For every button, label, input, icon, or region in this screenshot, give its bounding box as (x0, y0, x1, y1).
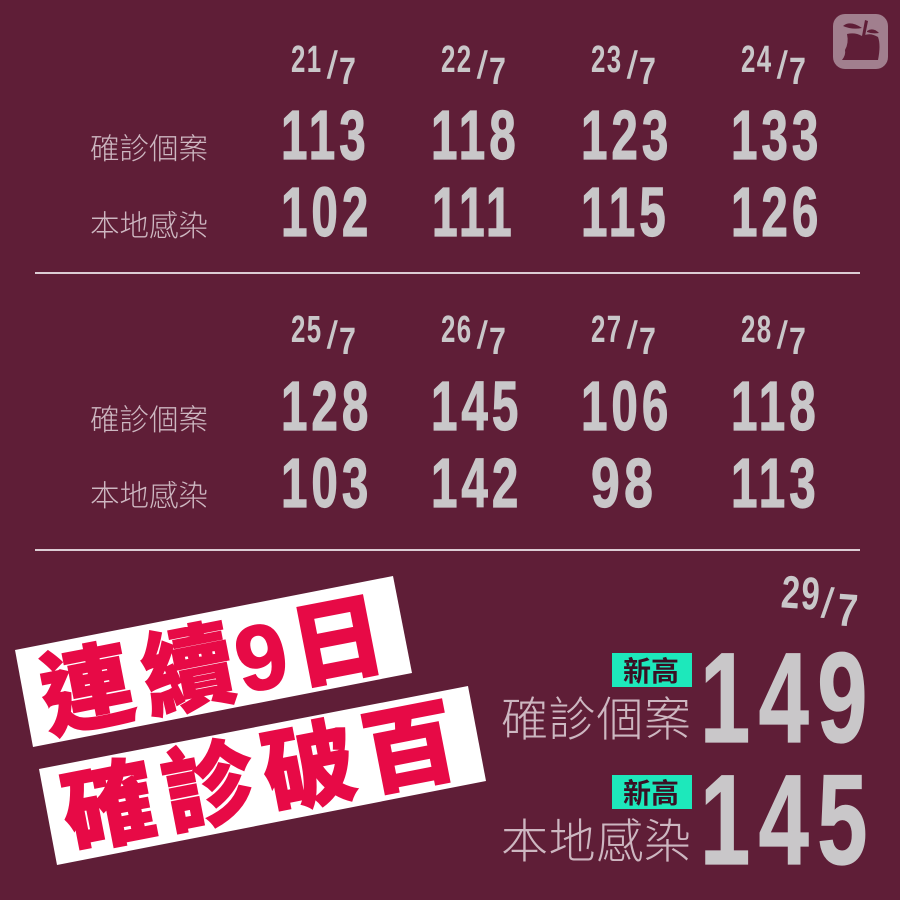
local infection numbers: 111 (432, 172, 515, 251)
confirmed case numbers: 106 (581, 367, 672, 445)
local infection numbers: 115 (581, 173, 670, 251)
banner: confirmed cases over one hundred: 確診破百 (54, 691, 465, 867)
local infection numbers: 98 (591, 444, 657, 523)
badge: new high, confirmed: 新高 (623, 656, 679, 687)
dates row 21-24 July: 22 (441, 38, 472, 80)
confirmed case numbers: 113 (281, 96, 370, 174)
number 145: 145 (700, 750, 876, 892)
dates row 21-24 July: 23 (591, 38, 622, 80)
dates row 21-24 July: 21 (291, 38, 322, 80)
dates row 25-28 July: 7 (639, 321, 658, 363)
confirmed case numbers: 118 (431, 96, 520, 174)
dates row 25-28 July: 7 (789, 321, 808, 363)
label: confirmed cases: 確診個案 (90, 133, 208, 166)
confirmed case numbers: 133 (731, 96, 822, 174)
date 29/7 (779, 567, 862, 637)
dates row 25-28 July: 25 (291, 308, 322, 350)
date 29/7: 29 (780, 567, 823, 620)
dates row 21-24 July: / (327, 45, 338, 87)
confirmed case numbers: 145 (431, 367, 522, 445)
dates row 21-24 July: 7 (789, 51, 808, 93)
label: local infections: 本地感染 (90, 210, 208, 243)
dates row 25-28 July: 7 (489, 321, 508, 363)
icon: apple logo (833, 14, 888, 69)
dates row 25-28 July: / (627, 315, 638, 357)
dates row 25-28 July: 7 (339, 321, 358, 363)
label: local infections large: 本地感染 (501, 815, 691, 868)
panel: latest day 29 July (501, 567, 876, 892)
banner: nine consecutive days: 連續9日 (32, 584, 393, 751)
dates row 21-24 July: 24 (741, 38, 772, 80)
local infection numbers: 113 (731, 444, 820, 522)
dates row 21-24 July (291, 38, 808, 93)
confirmed case numbers (281, 96, 822, 174)
number 149: 149 (700, 628, 876, 770)
dates row 21-24 July: / (477, 45, 488, 87)
dates row 21-24 July: / (777, 45, 788, 87)
confirmed case numbers (281, 367, 820, 445)
date 29/7: 7 (836, 583, 861, 637)
local infection numbers (281, 172, 822, 251)
confirmed case numbers: 123 (581, 96, 672, 174)
dates row 25-28 July: / (777, 315, 788, 357)
dates row 21-24 July: 7 (639, 51, 658, 93)
label: confirmed cases large: 確診個案 (501, 693, 691, 746)
confirmed case numbers: 118 (731, 367, 820, 445)
confirmed case numbers: 128 (281, 367, 372, 445)
dates row 25-28 July: / (327, 315, 338, 357)
badge: new high, confirmed (612, 653, 692, 687)
dates row 25-28 July: / (477, 315, 488, 357)
local infection numbers: 142 (431, 444, 522, 522)
dates row 25-28 July: 27 (591, 308, 622, 350)
dates row 25-28 July: 28 (741, 308, 772, 350)
local infection numbers: 126 (731, 173, 822, 251)
dates row 25-28 July: 26 (441, 308, 472, 350)
dates row 21-24 July: 7 (339, 51, 358, 93)
label: confirmed cases: 確診個案 (90, 404, 208, 437)
local infection numbers: 103 (281, 444, 372, 522)
date 29/7: / (820, 579, 835, 627)
badge: new high, local (612, 775, 692, 809)
panel: week row one (90, 38, 822, 251)
dates row 25-28 July (291, 308, 808, 363)
dates row 21-24 July: / (627, 45, 638, 87)
local infection numbers (281, 444, 820, 523)
dates row 21-24 July: 7 (489, 51, 508, 93)
panel: week row two (90, 308, 820, 523)
label: local infections: 本地感染 (90, 480, 208, 513)
badge: new high, local: 新高 (623, 778, 679, 809)
local infection numbers: 102 (281, 173, 372, 251)
